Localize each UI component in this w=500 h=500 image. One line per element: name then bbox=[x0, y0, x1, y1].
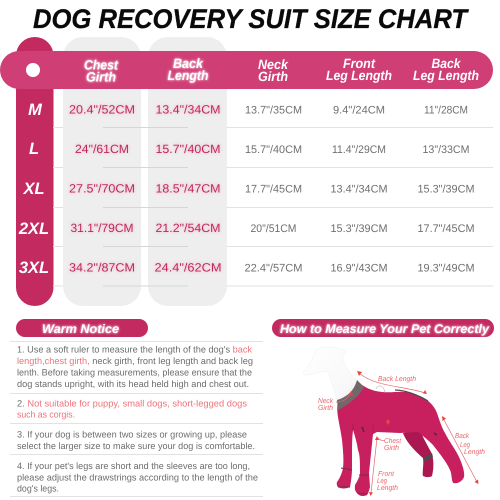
notice 1 bbox=[17, 344, 253, 389]
annotation: front leg length: Front bbox=[378, 469, 395, 478]
annotation: chest girth bbox=[378, 419, 402, 452]
annotation: neck girth bbox=[318, 391, 353, 412]
dog: white head and neck bbox=[303, 347, 364, 405]
chest girth values: 34.2"/87CM bbox=[69, 260, 135, 274]
annotation: back leg length: Back bbox=[455, 431, 469, 440]
front leg length values bbox=[330, 104, 388, 274]
back length values: 13.4"/34CM bbox=[156, 102, 220, 116]
header labels: Front bbox=[343, 56, 375, 71]
notice 1: dog stands upright, with its head held high and chest out. bbox=[17, 379, 249, 389]
dog: pink suit body and legs bbox=[337, 381, 464, 496]
front leg length values: 11.4"/29CM bbox=[332, 144, 386, 156]
header labels: Leg Length bbox=[413, 68, 479, 83]
chest girth values: 20.4"/52CM bbox=[69, 102, 135, 116]
header labels: Leg Length bbox=[326, 68, 392, 83]
header labels: Neck bbox=[258, 57, 289, 72]
back leg length values bbox=[418, 104, 474, 274]
back leg length values: 17.7"/45CM bbox=[418, 223, 474, 235]
header band bbox=[0, 51, 493, 89]
dog: paw bands and seams bbox=[338, 468, 369, 494]
notice 1: 1. Use a soft ruler to measure the length of the dog's back bbox=[17, 344, 252, 354]
back leg length values: 13"/33CM bbox=[422, 144, 470, 156]
chest girth values: 31.1"/79CM bbox=[70, 221, 134, 235]
neck girth values: 17.7"/45CM bbox=[245, 184, 302, 196]
annotation: front leg length: Leg bbox=[377, 476, 387, 485]
chest girth column background bbox=[63, 37, 141, 306]
size column background bbox=[16, 37, 54, 306]
chest girth values bbox=[69, 102, 135, 274]
notice 3: select the larger size to make sure your dog is comfortable. bbox=[17, 441, 255, 451]
annotation: back leg length: Leg bbox=[460, 440, 470, 449]
neck girth values: 13.7"/35CM bbox=[245, 104, 302, 116]
annotation: back leg length bbox=[442, 416, 485, 484]
how to measure heading pill: How to Measure Your Pet Correctly bbox=[280, 322, 490, 336]
back leg length values: 19.3"/49CM bbox=[418, 262, 474, 274]
back leg length values: 15.3"/39CM bbox=[418, 184, 474, 196]
size labels: 2XL bbox=[18, 220, 49, 238]
back length values: 24.4"/62CM bbox=[154, 260, 222, 274]
annotation: chest girth: Girth bbox=[384, 443, 399, 452]
panel: size chart table bbox=[0, 37, 493, 306]
notice 4: please adjust the drawstrings according to the length of the bbox=[17, 472, 258, 482]
dog: back trim bbox=[395, 390, 428, 401]
size labels: XL bbox=[22, 180, 45, 198]
annotation: back length: Back Length bbox=[378, 374, 416, 383]
chest girth values: 27.5"/70CM bbox=[69, 182, 135, 196]
panel: how to measure bbox=[272, 319, 494, 496]
annotation: back leg length: Length bbox=[464, 447, 485, 456]
back length values: 18.5"/47CM bbox=[156, 182, 220, 196]
title: DOG RECOVERY SUIT SIZE CHART bbox=[33, 4, 469, 34]
neck girth values: 15.7"/40CM bbox=[245, 144, 302, 156]
row divider lines bbox=[53, 128, 493, 286]
header labels: Girth bbox=[86, 70, 116, 84]
header labels: Back bbox=[173, 56, 204, 71]
header labels bbox=[84, 56, 479, 84]
notice 3 bbox=[17, 430, 255, 451]
notice 2 bbox=[17, 398, 247, 420]
dog: grey collar bbox=[337, 380, 364, 410]
header labels: Chest bbox=[84, 58, 118, 72]
notice 2: such as corgis. bbox=[17, 410, 75, 420]
header labels: Back bbox=[432, 56, 462, 71]
notice 4: dog's legs. bbox=[17, 484, 59, 494]
header labels: Girth bbox=[258, 69, 288, 84]
warm notice heading pill: Warm Notice bbox=[42, 322, 119, 336]
back length column background bbox=[148, 37, 227, 306]
size labels: L bbox=[29, 140, 39, 158]
front leg length values: 9.4"/24CM bbox=[333, 104, 385, 116]
size labels: M bbox=[28, 101, 43, 119]
notice 1: length,chest girth, neck girth, front leg length and back leg bbox=[17, 356, 253, 366]
annotation: chest girth: Chest bbox=[384, 436, 402, 445]
neck girth values bbox=[244, 104, 302, 274]
annotation: neck girth: Girth bbox=[318, 403, 333, 412]
size labels: 3XL bbox=[19, 259, 49, 277]
notice 4: 4. If your pet's legs are short and the sleeves are too long, bbox=[17, 461, 250, 471]
neck girth values: 22.4"/57CM bbox=[244, 262, 302, 274]
front leg length values: 16.9"/43CM bbox=[330, 262, 388, 274]
annotation: front leg length: Length bbox=[377, 483, 398, 492]
panel: warm notice bbox=[10, 319, 263, 496]
size labels bbox=[18, 101, 49, 277]
chest girth values: 24"/61CM bbox=[75, 142, 129, 156]
notice 2: 2. Not suitable for puppy, small dogs, short-legged dogs bbox=[17, 398, 247, 408]
notice dividers bbox=[10, 342, 263, 496]
annotation: front leg length bbox=[369, 436, 398, 496]
neck girth values: 20"/51CM bbox=[250, 223, 296, 235]
front leg length values: 13.4"/34CM bbox=[330, 184, 388, 196]
notice 1: lenth. Before taking measurements, please ensure that the bbox=[17, 368, 252, 378]
back length values bbox=[154, 102, 222, 274]
dog illustration with measurement annotations bbox=[303, 347, 485, 496]
header labels: Length bbox=[168, 68, 208, 83]
back length values: 15.7"/40CM bbox=[156, 142, 220, 156]
back leg length values: 11"/28CM bbox=[424, 104, 468, 116]
notice 3: 3. If your dog is between two sizes or growing up, please bbox=[17, 430, 247, 440]
back length values: 21.2"/54CM bbox=[156, 221, 220, 235]
dog: far back leg bbox=[403, 430, 433, 477]
front leg length values: 15.3"/39CM bbox=[330, 223, 388, 235]
annotation: neck girth: Neck bbox=[318, 396, 333, 405]
notice 4 bbox=[17, 461, 258, 494]
annotation: back length bbox=[357, 371, 427, 394]
dog: far back paw band bbox=[423, 453, 433, 462]
warm notice heading pill bbox=[16, 319, 148, 337]
header dot icon bbox=[26, 63, 40, 77]
